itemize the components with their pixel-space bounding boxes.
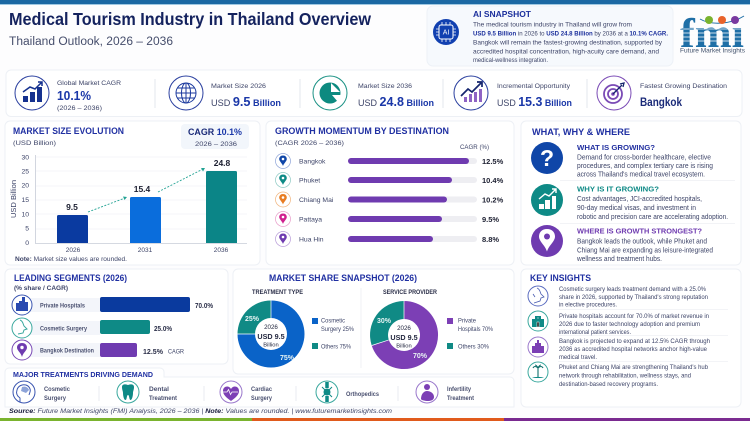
bar chart: 15: [21, 197, 29, 204]
insight: Bangkok: medical travel.: [559, 354, 597, 361]
bar chart: USD Billion: [11, 180, 18, 218]
block: where: wellness and treatment hubs.: [576, 256, 662, 263]
sub heading: (CAGR 2026 – 2036): [275, 140, 344, 147]
bar chart: [11, 154, 247, 254]
KPI: market size 2036: [313, 76, 434, 110]
donut: service provider: [370, 290, 493, 369]
source line: Source: Future Market Insights (FMI) Analysis, 2026 – 2036 | Note: Values are rounded. | www.futuremarketinsights.com: [9, 408, 393, 415]
KPI: global market CAGR: 10.1%: [57, 89, 91, 103]
text: AI snapshot body: USD 9.5 Billion in 2026 to USD 24.8 Billion by 2036 at a 10.1% CAGR.: [473, 30, 668, 38]
insight: private hospitals: 2026 due to faster technology adoption and premium: [559, 321, 700, 328]
row: private hospitals: 70.0%: [195, 303, 214, 310]
icon: AI chip: AI: [443, 30, 449, 36]
bar chart: 5: [25, 226, 29, 232]
legend: service provider: Hospitals 70%: [458, 326, 493, 333]
donut: treatment type: 2026: [264, 324, 278, 331]
item: dental treatment: [117, 381, 178, 403]
bar chart: 20: [21, 182, 29, 190]
bar chart: 2036: [214, 247, 229, 254]
row: Bangkok: [276, 154, 504, 168]
donut: treatment type: TREATMENT TYPE: [252, 290, 303, 296]
KPI: fastest growing destination: Bangkok: [640, 95, 682, 109]
KPI: market size 2036: USD 24.8 Billion: [358, 95, 434, 109]
panel: what why where: [521, 121, 741, 265]
insight: private hospitals: [528, 311, 709, 336]
insight: private hospitals: Private hospitals account for 70.0% of market revenue in: [559, 313, 709, 320]
bar chart: 10: [21, 212, 29, 218]
insight: Bangkok: [528, 337, 710, 361]
row: Pattaya: Pattaya: [299, 216, 322, 224]
text: AI snapshot body: medical-wellness integration.: [473, 57, 548, 64]
block: what: WHAT IS GROWING?: [577, 143, 655, 152]
bar chart: 30: [21, 154, 29, 162]
panel: leading segments: [5, 269, 228, 364]
KPI: fastest growing destination: Fastest Growing Destination: [640, 83, 727, 90]
unit label: (USD Billion): [13, 140, 56, 147]
KPI: market size 2026: USD 9.5 Billion: [211, 95, 281, 109]
legend: treatment type: Cosmetic: [321, 318, 346, 324]
subtitle: Thailand Outlook, 2026 – 2036: [9, 36, 173, 48]
donut: treatment type: USD 9.5: [257, 332, 285, 341]
donut: treatment type: 25%: [245, 316, 260, 323]
row: private hospitals: Private Hospitals: [40, 302, 85, 310]
donut: treatment type: [238, 290, 354, 368]
donut: treatment type: Billion: [263, 342, 279, 348]
KPI: fastest growing destination: [597, 76, 727, 110]
block: what: across Thailand's medical travel ecosystem.: [577, 172, 705, 178]
row: Bangkok destination: Bangkok Destination: [40, 348, 94, 354]
legend: service provider: Others 30%: [458, 344, 489, 350]
block: what: procedures, and complex tertiary care is rising: [577, 163, 713, 170]
bar chart: 2026: [66, 247, 81, 254]
legend: service provider: Private: [458, 318, 476, 324]
KPI: global market CAGR: [15, 76, 121, 112]
bar chart: 15.4: [134, 184, 151, 194]
block: why: robotic and precision care are accelerating adoption.: [577, 214, 728, 221]
insight: Phuket and Chiang Mai: Phuket and Chiang Mai are strengthening Thailand's hub: [559, 364, 708, 371]
column label: CAGR (%): [460, 144, 489, 151]
block: where: Chiang Mai are expanding as leisure-integrated: [577, 248, 713, 254]
top band: [0, 0, 750, 5]
heading: GROWTH MOMENTUM BY DESTINATION: [275, 126, 449, 136]
row: Bangkok: 12.5%: [482, 157, 504, 166]
callout: CAGR: [181, 124, 249, 149]
panel: major treatments: [5, 368, 514, 407]
insight: cosmetic surgery: in elective procedures.: [559, 302, 617, 308]
row: Chiang Mai: Chiang Mai: [299, 197, 334, 204]
legend: treatment type: Surgery 25%: [321, 326, 354, 333]
KPI: market size 2036: Market Size 2036: [358, 83, 412, 90]
block: where: [531, 225, 713, 263]
donut: service provider: USD 9.5: [390, 333, 418, 342]
insight: Phuket and Chiang Mai: destination-based recovery programs.: [559, 381, 658, 388]
title: Medical Tourism Industry in Thailand Overview: [9, 9, 371, 29]
panel: market size evolution: [5, 121, 260, 265]
block: where: Bangkok leads the outlook, while Phuket and: [577, 238, 707, 246]
row: private hospitals: [12, 295, 214, 315]
bar chart: 0: [25, 240, 29, 247]
item: orthopedics: [316, 381, 379, 403]
legend: treatment type: Others 75%: [321, 344, 351, 350]
item: cosmetic surgery: Surgery: [44, 395, 66, 402]
row: Pattaya: 9.5%: [482, 215, 499, 224]
bar chart: 25: [21, 168, 29, 176]
bar chart: 9.5: [66, 202, 78, 212]
KPI: global market CAGR: Global Market CAGR: [57, 80, 121, 87]
callout: CAGR: CAGR 10.1%: [188, 127, 242, 137]
insight: Phuket and Chiang Mai: network through rehabilitation, wellness stays, and: [559, 372, 691, 380]
insight: Phuket and Chiang Mai: [528, 362, 708, 388]
block: where: WHERE IS GROWTH STRONGEST?: [577, 226, 702, 236]
row: Phuket: 10.4%: [482, 176, 504, 185]
row: cosmetic surgery: 25.0%: [154, 326, 173, 333]
item: infertility treatment: Infertility: [447, 386, 471, 393]
item: cosmetic surgery: [13, 381, 70, 403]
KPI: incremental opportunity: USD 15.3 Billion: [497, 95, 572, 109]
block: why: WHY IS IT GROWING?: [577, 184, 659, 194]
row: Chiang Mai: 10.2%: [482, 196, 504, 204]
heading: AI snapshot: AI SNAPSHOT: [473, 9, 532, 19]
icon: AI chip: [433, 19, 459, 45]
block: what: ?: [540, 145, 554, 171]
row: Hua Hin: Hua Hin: [299, 236, 324, 244]
item: cardiac surgery: Surgery: [251, 395, 272, 402]
item: dental treatment: Dental: [149, 386, 169, 393]
KPI: global market CAGR: (2026 – 2036): [57, 106, 102, 112]
insight: Bangkok: 2036 as accredited hospital networks anchor high-value: [559, 346, 707, 353]
KPI: market size 2026: Market Size 2026: [211, 83, 266, 90]
insight: cosmetic surgery: Cosmetic surgery leads treatment demand with a 25.0%: [559, 286, 706, 293]
row: Bangkok: Bangkok: [299, 158, 326, 166]
row: Bangkok destination: CAGR: [168, 350, 185, 356]
item: infertility treatment: Treatment: [447, 395, 475, 402]
panel: growth momentum by destination: [266, 121, 514, 265]
insight: cosmetic surgery: share in 2026, supported by Thailand's strong reputation: [559, 294, 708, 301]
donut: service provider: 2026: [397, 325, 411, 332]
logo: FMI: Future Market Insights: [680, 48, 745, 54]
block: why: 90-day medical visas, and investment in: [577, 205, 696, 212]
heading: MARKET SIZE EVOLUTION: [13, 126, 124, 136]
donut: service provider: SERVICE PROVIDER: [383, 290, 438, 296]
row: Phuket: Phuket: [299, 178, 320, 184]
sub heading: (% share / CAGR): [14, 286, 68, 292]
row: Phuket: [276, 172, 504, 188]
text: AI snapshot body: The medical tourism industry in Thailand will grow from: [473, 22, 632, 28]
item: cardiac surgery: [220, 381, 272, 403]
row: cosmetic surgery: [12, 318, 173, 338]
bottom colour band: [0, 418, 750, 421]
KPI: incremental opportunity: Incremental Opportunity: [497, 83, 571, 90]
row: Hua Hin: 8.8%: [482, 235, 499, 244]
legend: treatment type: [312, 318, 354, 350]
block: why: Cost advantages, JCI-accredited hospitals,: [577, 196, 702, 203]
panel: market share snapshot: [233, 269, 514, 374]
donut: service provider: 70%: [413, 353, 428, 360]
bar chart: 2031: [138, 247, 153, 254]
item: infertility treatment: [416, 381, 475, 403]
logo: FMI: fmi: [680, 10, 744, 56]
heading: MAJOR TREATMENTS DRIVING DEMAND: [13, 370, 154, 379]
row: Hua Hin: [276, 232, 499, 246]
text: AI snapshot body: [473, 22, 668, 64]
block: what: [531, 142, 713, 178]
text: AI snapshot body: accredited hospital concentration, high-acuity care demand, and: [473, 48, 659, 56]
row: Bangkok destination: [12, 340, 185, 360]
insight: cosmetic surgery: [528, 286, 708, 308]
arrow: growth trend: [88, 168, 205, 212]
item: cardiac surgery: Cardiac: [251, 386, 272, 393]
KPI: market size 2026: [169, 76, 281, 110]
block: what: Demand for cross-border healthcare, elective: [577, 154, 711, 162]
callout: CAGR: 2026 – 2036: [195, 141, 237, 148]
item: dental treatment: Treatment: [149, 395, 178, 402]
row: Pattaya: [276, 212, 499, 226]
panel: KPI strip: [6, 70, 742, 116]
text: AI snapshot body: Bangkok will remain the fastest-growing destination, supported by: [473, 40, 663, 46]
item: orthopedics: Orthopedics: [346, 391, 379, 398]
legend: service provider: [447, 318, 493, 350]
panel: AI snapshot: [427, 6, 673, 66]
row: Chiang Mai: [276, 192, 504, 207]
row: cosmetic surgery: Cosmetic Surgery: [40, 326, 87, 332]
heading: LEADING SEGMENTS (2026): [14, 273, 127, 283]
bar chart: 24.8: [214, 158, 231, 168]
block: why: [531, 184, 728, 221]
note: Note: Market size values are rounded.: [15, 257, 127, 263]
heading: KEY INSIGHTS: [530, 273, 591, 284]
donut: service provider: Billion: [396, 344, 412, 350]
row: Bangkok destination: 12.5%: [143, 347, 163, 356]
insight: private hospitals: international patient services.: [559, 329, 631, 336]
donut: service provider: 30%: [377, 318, 392, 325]
donut: treatment type: 75%: [280, 355, 295, 362]
heading: MARKET SHARE SNAPSHOT (2026): [269, 273, 417, 283]
panel: key insights: [521, 269, 741, 407]
heading: WHAT, WHY & WHERE: [532, 127, 630, 138]
KPI: incremental opportunity: [454, 76, 572, 110]
item: cosmetic surgery: Cosmetic: [44, 386, 70, 393]
insight: Bangkok: Bangkok is projected to expand at 12.5% CAGR through: [559, 338, 710, 345]
